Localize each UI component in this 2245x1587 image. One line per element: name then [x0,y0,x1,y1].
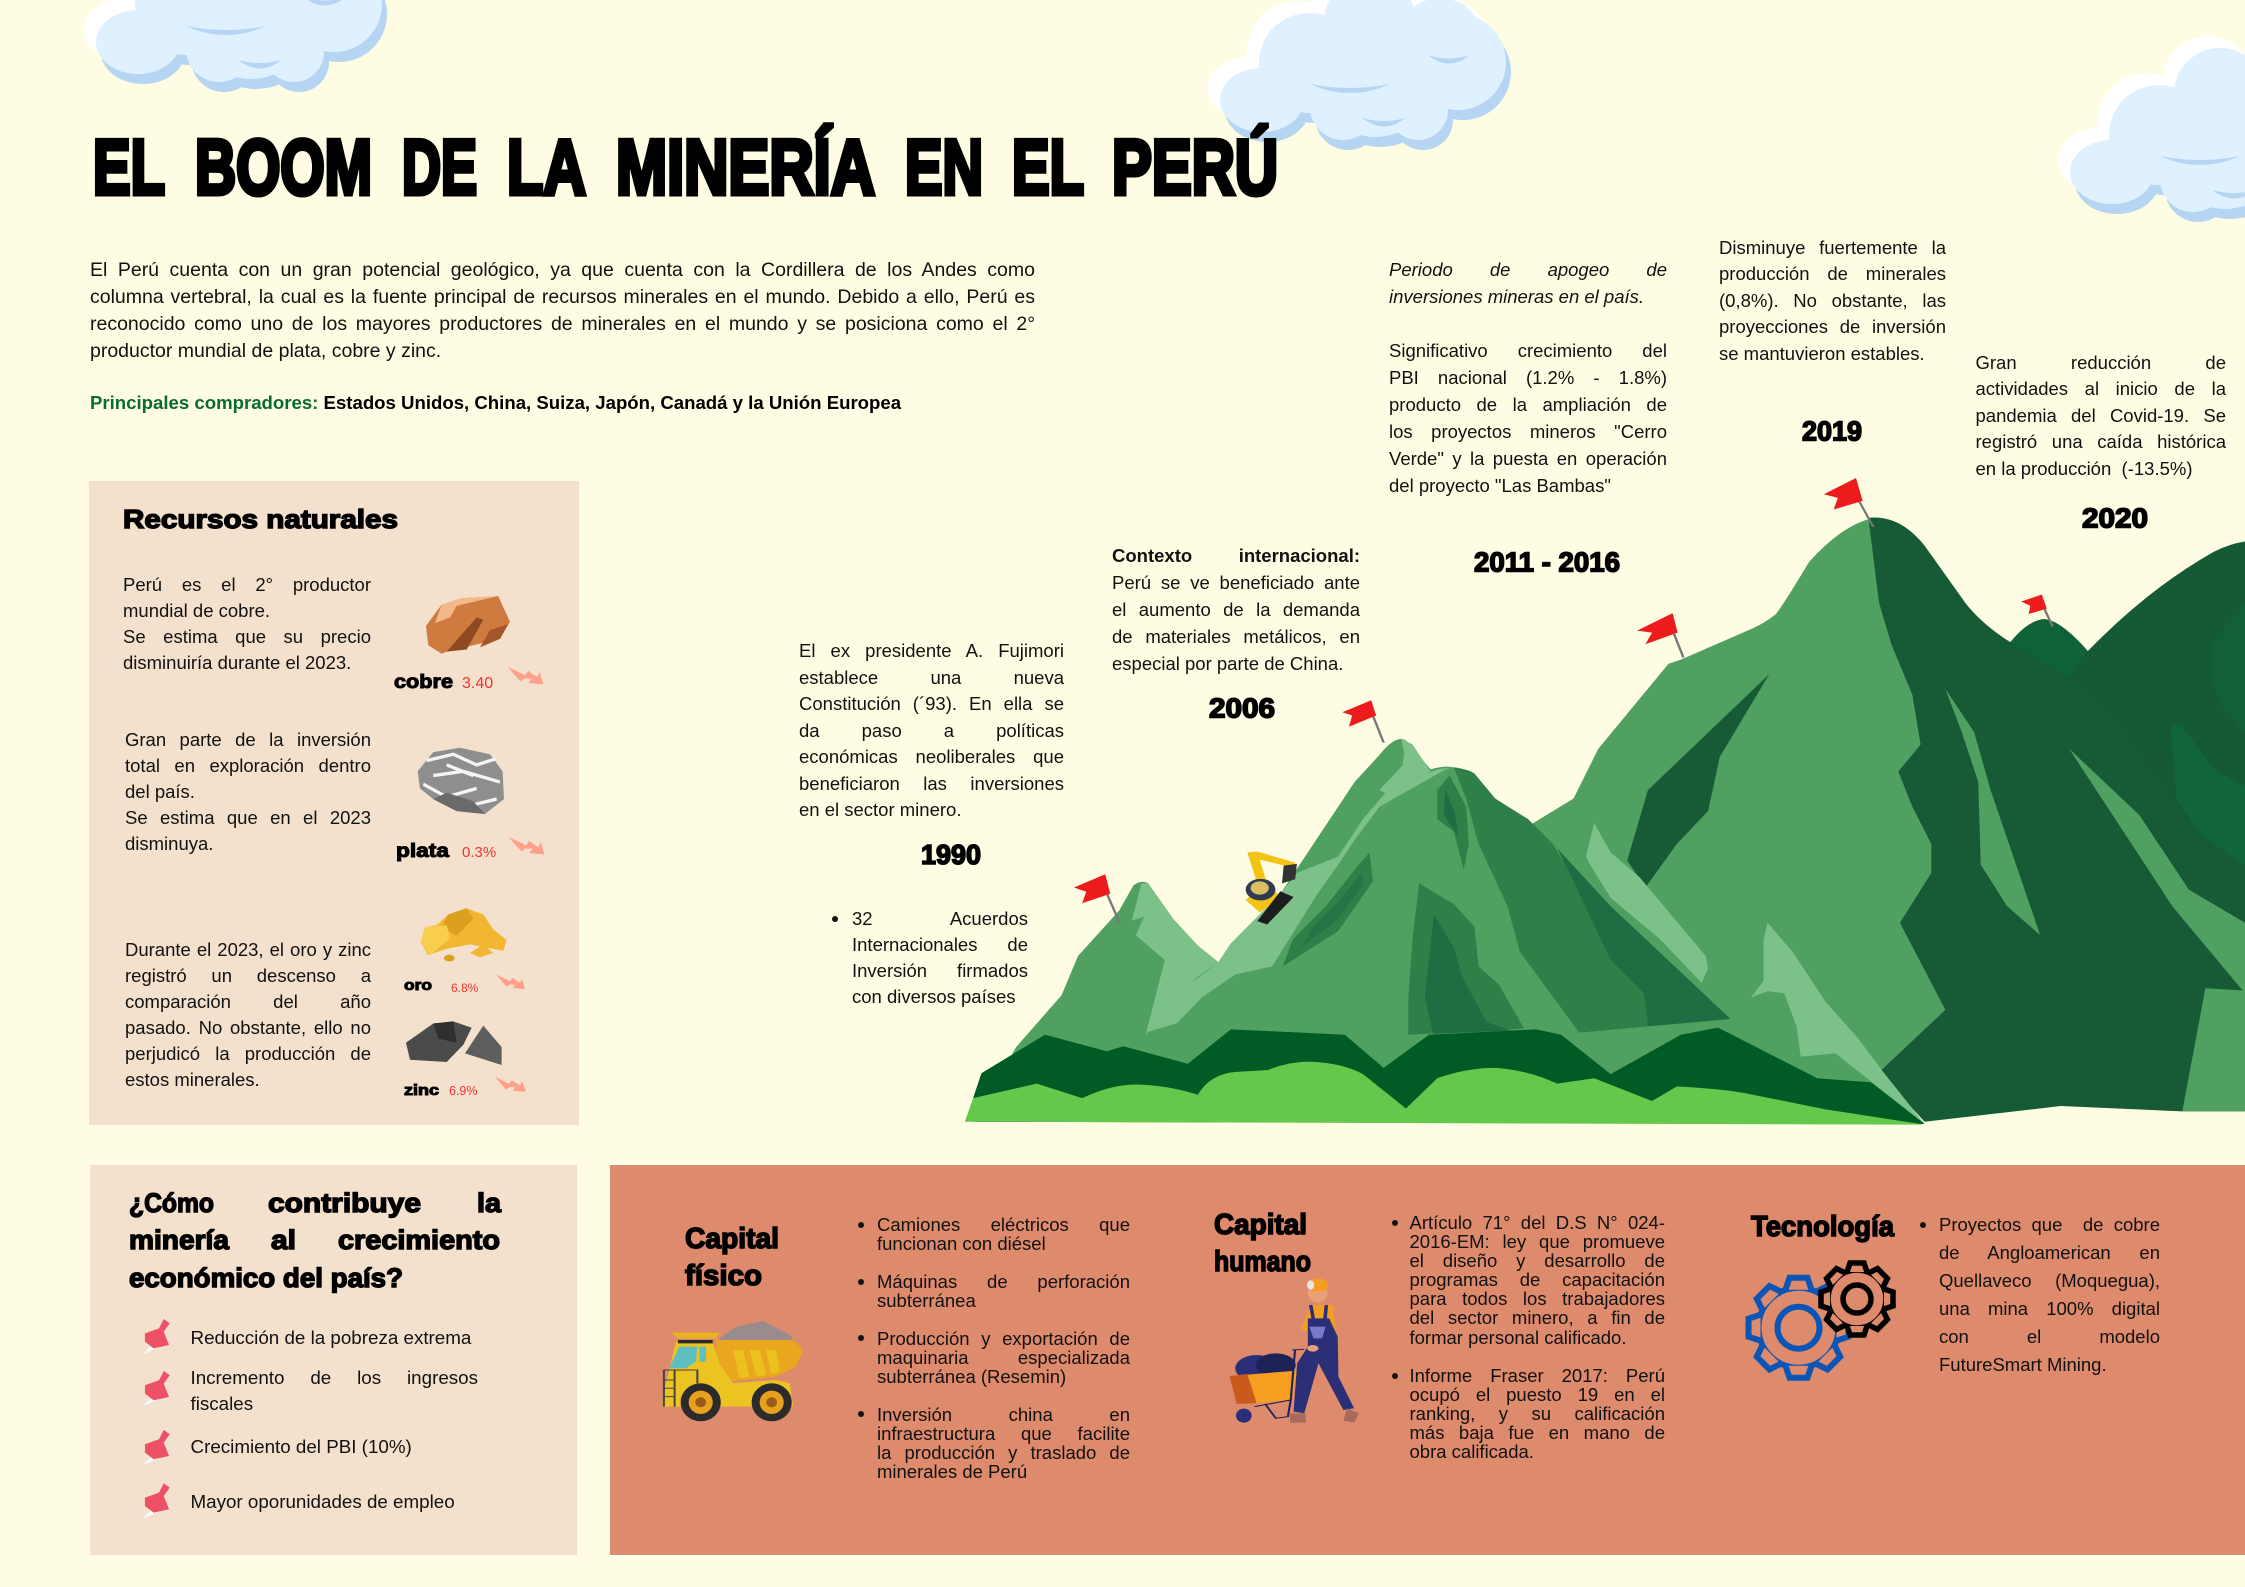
text: oro y zinc [125,938,372,1090]
capital humano list: 2016-EM: ley que promueve [1410,1231,1665,1252]
icon: blue gear [1748,1278,1848,1378]
icon: pin 1 [142,1319,170,1355]
title [93,122,1278,211]
item: PBI: Crecimiento del PBI (10%) [190,1436,412,1457]
timeline text: 2006 [1112,544,1360,674]
text: plata: disminuya. [125,833,213,854]
text: cobre [123,574,371,673]
intro text: El Perú cuenta con un gran potencial geológico, ya que cuenta con la Cordillera de los Andes como [90,258,1035,280]
timeline text: 1990: Constitución (´93). En ella se [799,693,1064,714]
icon: excavator [1246,851,1297,924]
year: 2006: 2006 [1209,692,1275,724]
icon: miner with wheelbarrow [1230,1278,1359,1423]
timeline text: 2019: proyecciones de inversión [1719,316,1946,337]
text: oro y zinc: estos minerales. [125,1069,260,1090]
left peak light side [1132,883,1218,1035]
arrow: oro [496,974,525,989]
middle mountain facets [1283,767,1730,1035]
timeline years [921,416,2148,870]
item: ingresos: Incremento de los ingresos [190,1367,478,1388]
heading: como contribuye [129,1188,502,1293]
capital fisico list: la producción y traslado de [877,1442,1130,1463]
label: zinc: zinc [404,1082,439,1099]
tecnologia list: Proyectos que de cobre [1939,1214,2160,1235]
timeline text: 2011-2016: del proyecto "Las Bambas" [1389,475,1611,496]
cloud: top left [84,0,387,92]
timeline text: 2020: Gran reducción de [1976,352,2226,372]
flag: 2019 [1824,478,1873,527]
heading and pin icons [129,1188,502,1519]
intro text: reconocido como uno de los mayores productores de minerales en el mundo y se posiciona como el 2° [90,312,1035,334]
heading: como contribuye: la [477,1188,502,1218]
timeline text: 2006: Perú se ve beneficiado ante [1112,572,1360,592]
heading: capital fisico: físico [685,1260,762,1292]
tecnologia list: con el modelo [1939,1326,2160,1347]
capital humano list: Artículo 71° del D.S N° 024- [1410,1212,1665,1233]
tecnologia list: FutureSmart Mining. [1939,1354,2107,1375]
capital fisico list: infraestructura que facilite [877,1423,1130,1444]
text: plata: del país. [125,781,195,802]
text: plata: total en exploración dentro [125,755,371,776]
timeline text: 2006: de materiales metálicos, en [1112,626,1360,646]
value: cobre: 3.40 [462,675,493,692]
text: plata [125,729,371,854]
capital humano list: obra calificada. [1410,1441,1534,1462]
year: 2020: 2020 [2082,502,2148,534]
capital humano list: el diseño y desarrollo de [1410,1250,1665,1271]
flag: 2011-2016 [1637,613,1683,658]
capital humano list [1392,1212,1665,1462]
text: cobre: disminuiría durante el 2023. [123,652,351,673]
icon: dump truck [663,1321,803,1421]
timeline text: 2011-2016: producto de la ampliación de [1389,394,1667,415]
mineral icons and labels [123,504,544,1099]
timeline text: 1990: establece una nueva [799,666,1064,688]
headings and icons [662,1209,1896,1423]
capital fisico list: funcionan con diésel [877,1233,1046,1254]
text: oro y zinc: pasado. No obstante, ello no [125,1017,371,1038]
capital fisico list: maquinaria especializada [877,1347,1130,1368]
timeline bullet: 1990: Inversión firmados [852,960,1028,980]
year: 2011-2016: 2011 - 2016 [1474,546,1620,578]
heading: como contribuye: minería [129,1225,230,1255]
mountain range [965,478,2245,1125]
icon: pin 4 [142,1483,170,1519]
principales compradores: Principales compradores: Estados Unidos, China, Suiza, Japón, Canadá y la Unión Europea [90,392,901,412]
timeline text: 2006: Contexto internacional: [1112,544,1360,566]
light ridges on main mountain [1586,823,1925,1124]
title: DE [402,123,477,211]
capital fisico list: Inversión china en [877,1404,1130,1425]
text: cobre: Perú es el 2° productor [123,574,371,595]
text: oro y zinc: registró un descenso a [125,965,371,986]
flag: 1990 [1074,874,1119,922]
capital humano list: programas de capacitación [1410,1269,1665,1290]
back mountain right [2010,541,2245,919]
value: zinc: 6.9% [449,1084,478,1098]
heading: como contribuye: al [271,1225,296,1255]
timeline bullet: 1990: con diversos países [852,986,1016,1006]
item: empleo: Mayor oporunidades de empleo [190,1491,455,1512]
timeline text: 1990: en el sector minero. [799,799,961,820]
light stripes on dark face [1945,689,2245,1111]
capital humano list: ocupó el puesto 19 en el [1410,1384,1665,1405]
heading: como contribuye: contribuye [268,1188,421,1218]
title: EL [93,123,165,211]
dark wedge on main mountain [1627,674,1769,888]
year: 1990: 1990 [921,839,981,870]
text: plata: Gran parte de la inversión [125,729,371,750]
icon: gold nuggets [421,908,507,962]
text: oro y zinc: perjudicó la producción de [125,1043,371,1064]
timeline text: 2006: especial por parte de China. [1112,652,1343,674]
label: oro: oro [404,977,432,994]
year: 2019: 2019 [1802,416,1862,446]
middle mountain light ridge [1146,767,1452,1033]
icon: black gear [1821,1263,1893,1335]
timeline text: 1990: da paso a políticas [799,720,1064,740]
timeline text: 2019: (0,8%). No obstante, las [1719,290,1946,311]
capital humano list: más baja fue en mano de [1410,1422,1665,1443]
timeline text: 2019: Disminuye fuertemente la [1719,236,1946,258]
timeline text: 2011-2016: PBI nacional (1.2% - 1.8%) [1389,367,1667,388]
timeline text: 2019 [1719,236,1946,364]
heading: capital humano: Capital [1214,1209,1307,1241]
arrow: plata [508,837,544,855]
timeline text: 1990: El ex presidente A. Fujimori [799,640,1064,661]
capital humano list: Informe Fraser 2017: Perú [1410,1365,1665,1386]
title: EN [905,123,983,211]
cloud: top right [2058,36,2245,222]
timeline text: 1990: beneficiaron las inversiones [799,772,1064,794]
timeline text: 2020: en la producción (-13.5%) [1976,458,2192,479]
icons in zoom coords [406,596,544,1092]
timeline text: 2011-2016: Significativo crecimiento del [1389,340,1667,361]
icon: copper rock [426,596,510,654]
panel: como contribuye la mineria [90,1165,577,1555]
main mountain silhouette [975,518,1945,1124]
flag: 2006 [1342,700,1384,742]
heading: capital humano: humano [1214,1246,1311,1278]
tecnologia list: de Angloamerican en [1939,1242,2160,1263]
timeline text: 2020: actividades al inicio de la [1976,378,2226,399]
cloud: top centre [1208,0,1511,150]
icon: pin 3 [142,1430,170,1466]
panel: capital y tecnologia [610,1165,2245,1555]
timeline text: 2019: se mantuvieron estables. [1719,343,1925,364]
value: oro: 6.8% [451,981,479,995]
title: PERÚ [1112,123,1278,211]
capital humano list: para todos los trabajadores [1410,1288,1665,1309]
timeline text: 1990 [799,640,1064,820]
heading: capital humano [1214,1209,1311,1278]
capital humano list: del sector minero, a fin de [1410,1307,1665,1328]
text: oro y zinc: Durante el 2023, el oro y zinc [125,938,371,960]
label: plata: plata [396,841,450,862]
timeline bullet: 1990: 32 Acuerdos [852,908,1028,928]
capital fisico list: Máquinas de perforación [877,1271,1130,1292]
heading: capital fisico: Capital [685,1223,779,1255]
timeline text: 2020: pandemia del Covid-19. Se [1976,405,2226,426]
tecnologia list: Quellaveco (Moquegua), [1939,1270,2160,1291]
heading: capital fisico [685,1223,779,1292]
heading: recursos naturales: Recursos naturales [123,504,398,534]
capital fisico list: subterránea (Resemin) [877,1366,1066,1387]
text: cobre: mundial de cobre. [123,600,270,621]
text: plata: Se estima que en el 2023 [125,807,371,828]
text: cobre: Se estima que su precio [123,626,371,647]
timeline text: 2020 [1976,352,2226,479]
title: EL [1012,123,1084,211]
item: pobreza: Reducción de la pobreza extrema [190,1327,471,1348]
heading: como contribuye: ¿Cómo [129,1188,214,1218]
icon: silver rock [418,748,504,814]
capital fisico list: minerales de Perú [877,1461,1027,1482]
timeline text: 2019: producción de minerales [1719,263,1946,284]
tecnologia list [1920,1214,2160,1375]
light green foreground hill [965,1062,1925,1125]
text: oro y zinc: comparación del año [125,991,371,1012]
intro text: productor mundial de plata, cobre y zinc. [90,340,441,362]
capital humano list: ranking, y su calificación [1410,1403,1665,1424]
timeline text: 1990: económicas neoliberales que [799,746,1064,767]
capital humano list: formar personal calificado. [1410,1327,1626,1348]
label: cobre: cobre [394,672,453,693]
timeline bullet: 1990 [852,908,1028,1007]
intro text: columna vertebral, la cual es la fuente principal de recursos minerales en el mundo. Debido a ello, Perú es [90,286,1035,308]
timeline text: 2011-2016 [1389,258,1667,496]
capital fisico list: subterránea [877,1290,976,1311]
item: ingresos: fiscales [190,1393,253,1414]
panel: recursos naturales [89,481,579,1125]
capital fisico list: Camiones eléctricos que [877,1214,1130,1235]
item: ingresos [190,1367,478,1414]
main mountain dark face [1868,518,2245,1122]
arrow: zinc [495,1077,526,1092]
icon: pin 2 [142,1371,170,1407]
capital fisico list: Producción y exportación de [877,1328,1130,1349]
timeline text: 2011-2016: Periodo de apogeo de [1389,258,1667,280]
timeline text: 2020: registró una caída histórica [1976,431,2226,452]
title: BOOM [195,123,372,211]
middle back peak light side [1379,738,1431,794]
value: plata: 0.3% [462,844,496,861]
title: MINERÍA [616,123,875,211]
heading: como contribuye: económico del país? [129,1263,403,1293]
timeline text: 2011-2016: Verde" y la puesta en operación [1389,448,1667,469]
tecnologia list: una mina 100% digital [1939,1298,2160,1319]
heading: tecnologia: Tecnología [1751,1211,1895,1243]
title: LA [507,123,586,211]
dark forest band [973,1028,1925,1124]
capital fisico list [858,1214,1130,1482]
timeline bullet: 1990: Internacionales de [852,934,1028,954]
arrow: cobre [507,667,543,685]
timeline text: 2011-2016: los proyectos mineros "Cerro [1389,421,1667,442]
flag: 2020 [2021,595,2053,626]
timeline text: 2006: el aumento de la demanda [1112,598,1360,620]
heading: como contribuye: crecimiento [338,1225,500,1255]
icon: zinc rocks [406,1021,502,1065]
intro text [90,258,1035,362]
timeline text: 2011-2016: inversiones mineras en el país. [1389,286,1644,307]
